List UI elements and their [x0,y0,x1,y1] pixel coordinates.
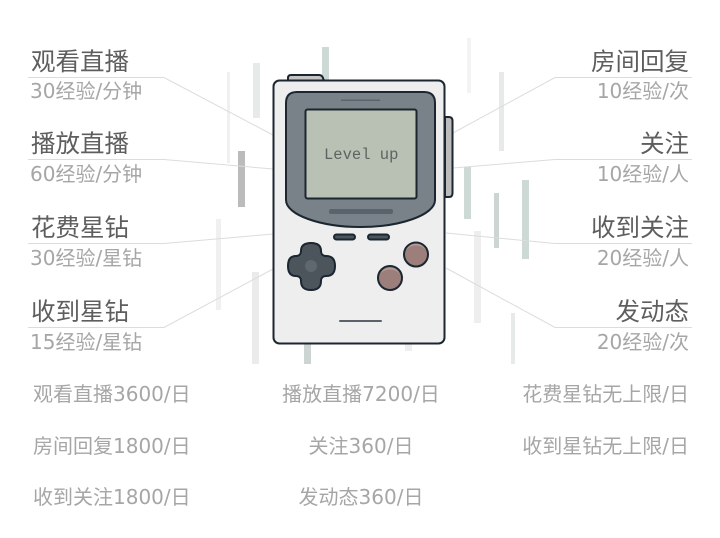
limits row 2: 关注360/日 [309,434,413,458]
label: spend star diamonds: 花费星钻 [31,209,129,244]
limits row 1: 花费星钻无上限/日 [522,382,689,406]
label: receive star diamonds: 15经验/星钻 [30,330,142,354]
label: watch live: 观看直播 [31,43,129,78]
console body [274,80,444,344]
button A [404,242,428,266]
d-pad [288,243,335,290]
screen bezel [286,92,435,227]
limits row 3: 发动态360/日 [299,485,423,509]
label: watch live [30,43,142,103]
LCD screen [306,110,416,198]
label: gain follower: 收到关注 [591,209,689,244]
label: receive star diamonds [30,293,142,354]
right labels [591,43,689,354]
screen text: Level up [324,146,398,164]
limits row 1: 播放直播7200/日 [282,382,440,406]
label: follow: 10经验/人 [597,162,689,186]
select button [334,234,355,240]
limits row 3 [33,485,423,509]
limits row 2: 房间回复1800/日 [33,434,191,458]
label: gain follower [591,209,689,270]
limits row 2 [33,434,689,458]
bottom slit [339,320,382,322]
limits row 1 [33,382,689,406]
background bars [216,38,529,364]
top power switch [288,75,324,81]
label: watch live: 30经验/分钟 [30,79,142,103]
label: broadcast live: 60经验/分钟 [30,162,142,186]
label: room question [591,43,689,103]
label: follow [597,125,689,186]
label: broadcast live [30,125,142,186]
label: gain follower: 20经验/人 [597,246,689,270]
button B [378,266,402,290]
leader lines [28,78,692,328]
start button [368,234,389,240]
label: receive star diamonds: 收到星钻 [31,293,129,328]
left labels [30,43,142,354]
label: spend star diamonds [30,209,142,270]
label: room question: 10经验/次 [597,79,689,103]
label: post update: 发动态 [616,293,689,328]
label: post update [597,293,689,354]
label: spend star diamonds: 30经验/星钻 [30,246,142,270]
side wheel [445,117,452,197]
label: follow: 关注 [640,125,689,160]
brand bar [329,209,393,214]
label: broadcast live: 播放直播 [31,125,129,160]
limits row 3: 收到关注1800/日 [33,485,191,509]
label: post update: 20经验/次 [597,330,689,354]
speaker slit [341,100,380,101]
limits row 2: 收到星钻无上限/日 [522,434,689,458]
game console [274,75,452,344]
daily limits [33,382,689,509]
label: room question: 房间回复 [591,43,689,78]
limits row 1: 观看直播3600/日 [33,382,191,406]
